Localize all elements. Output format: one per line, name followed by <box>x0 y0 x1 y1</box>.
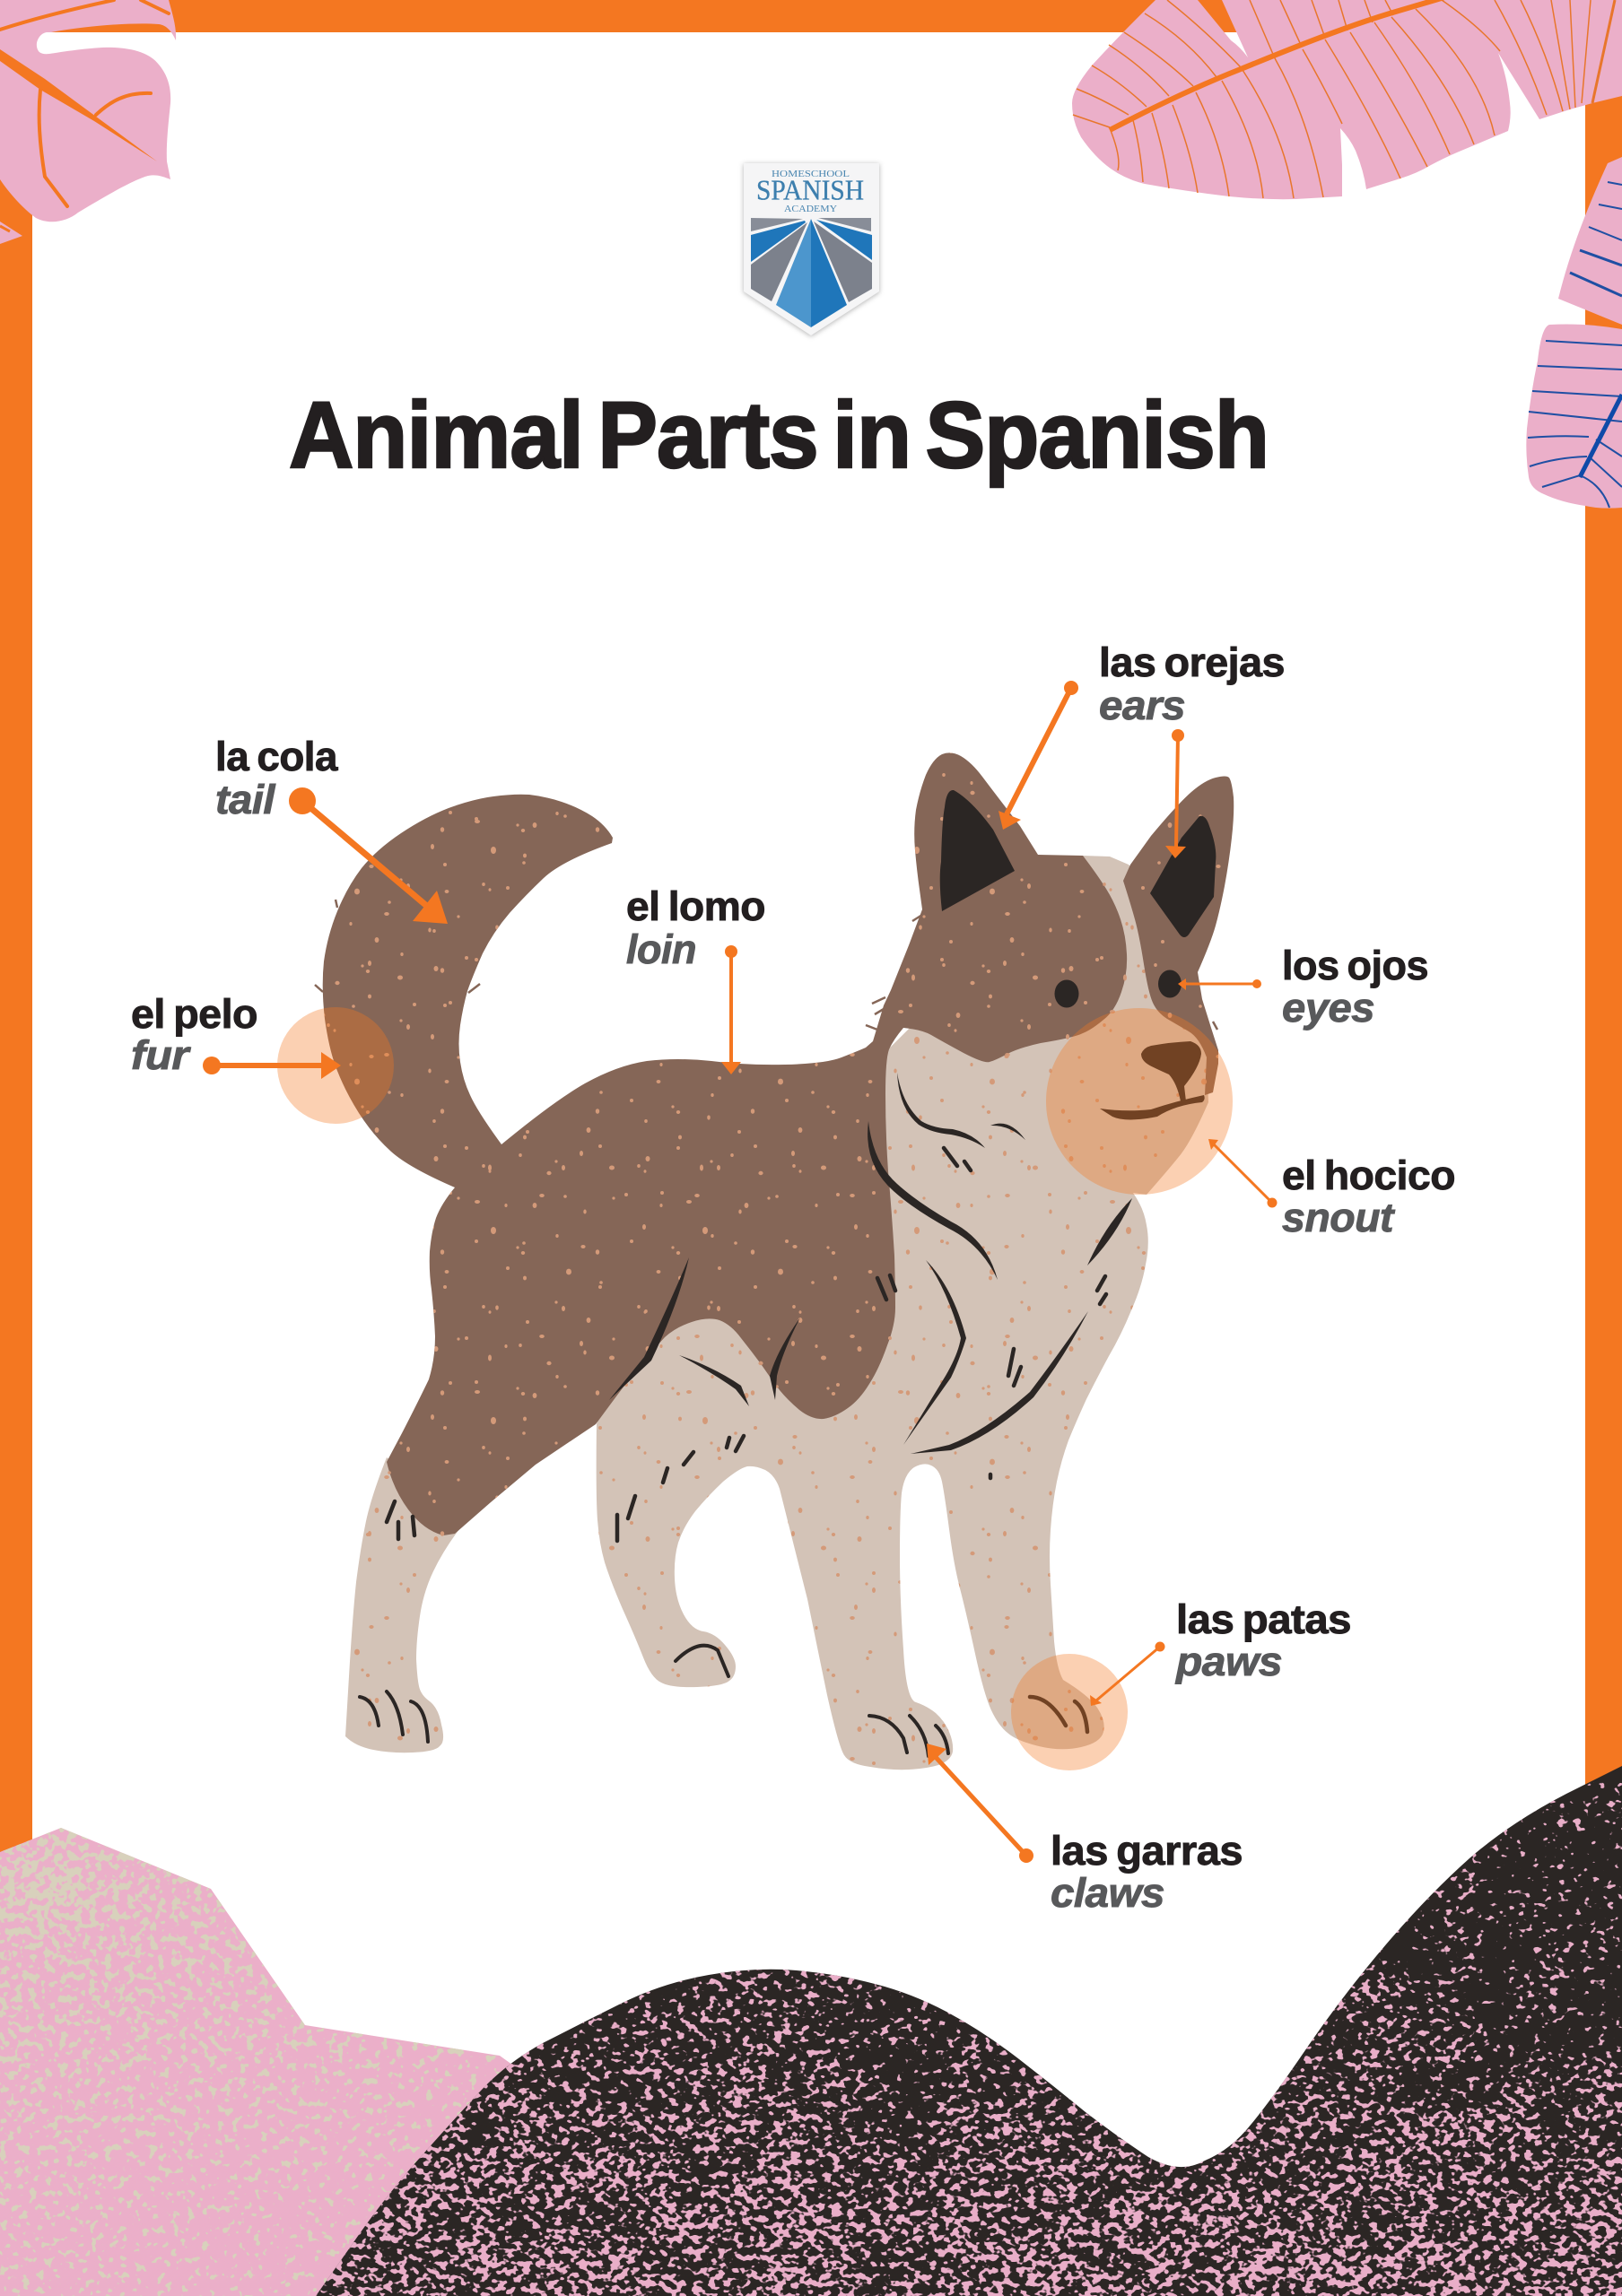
dog illustration <box>315 752 1234 1770</box>
logo: Homeschool Spanish Academy shield <box>744 163 879 335</box>
logo: Homeschool Spanish Academy shield: SPANISH <box>756 174 864 206</box>
label: las garras / claws: las garras <box>1051 1828 1243 1874</box>
logo: Homeschool Spanish Academy shield: HOMESCHOOL <box>772 169 850 179</box>
arrow: paws <box>1090 1641 1164 1706</box>
arrow: ears left <box>998 681 1078 830</box>
label: las patas / paws: paws <box>1175 1639 1282 1684</box>
leaf: top left <box>0 0 176 244</box>
leaf: right upper <box>1558 157 1622 325</box>
label: el hocico / snout <box>1282 1152 1455 1240</box>
dog: small marks and claws <box>360 1148 1106 1756</box>
label: el lomo / loin: el lomo <box>626 883 765 929</box>
pink textured shape: bottom left <box>0 1821 556 2296</box>
arrow: snout <box>1208 1139 1278 1207</box>
label: las garras / claws <box>1051 1828 1243 1916</box>
arrow: eyes <box>1178 978 1261 990</box>
dog: cream body <box>345 856 1208 1770</box>
arrow: claws <box>927 1744 1033 1863</box>
dog: brown coat <box>323 752 1234 1535</box>
highlight circle: snout <box>1046 1008 1233 1195</box>
leaf: right lower <box>1526 325 1622 509</box>
label: las orejas / ears: ears <box>1099 683 1185 728</box>
label: las patas / paws: las patas <box>1176 1596 1351 1642</box>
label: el lomo / loin: loin <box>626 926 696 972</box>
label: los ojos / eyes <box>1282 943 1428 1031</box>
leaf: top right large <box>1072 0 1622 199</box>
label: el lomo / loin <box>626 883 765 972</box>
arrow: fur <box>203 1052 341 1079</box>
arrow: loin <box>721 945 741 1074</box>
label: el hocico / snout: snout <box>1282 1195 1396 1240</box>
label: el pelo / fur <box>131 991 257 1078</box>
label: los ojos / eyes: los ojos <box>1282 943 1428 988</box>
label: el hocico / snout: el hocico <box>1282 1152 1455 1198</box>
label: las patas / paws <box>1175 1596 1351 1684</box>
dog: eyes <box>1055 970 1182 1008</box>
label: el pelo / fur: fur <box>131 1032 191 1078</box>
label: la cola / tail <box>215 734 338 822</box>
arrow: ears right <box>1165 729 1186 858</box>
dog: ears inner <box>940 790 1216 937</box>
dark textured hills: bottom <box>316 1766 1622 2296</box>
label: la cola / tail: tail <box>215 777 276 822</box>
dog: fur lines <box>609 1073 1132 1454</box>
highlight circle: paws <box>1011 1654 1128 1770</box>
label: las orejas / ears: las orejas <box>1099 639 1285 685</box>
label: los ojos / eyes: eyes <box>1282 985 1374 1031</box>
label: las garras / claws: claws <box>1051 1870 1164 1916</box>
label: las orejas / ears <box>1099 639 1285 728</box>
dog: nose and mouth <box>1100 1041 1205 1119</box>
label: la cola / tail: la cola <box>215 734 338 779</box>
dog: fur wisps <box>315 900 1217 1030</box>
label: el pelo / fur: el pelo <box>131 991 257 1037</box>
logo: Homeschool Spanish Academy shield: ACADEMY <box>784 204 837 214</box>
arrow: tail <box>289 787 448 924</box>
highlight circle: fur <box>277 1007 394 1124</box>
title: Animal Parts in Spanish <box>289 383 1269 488</box>
